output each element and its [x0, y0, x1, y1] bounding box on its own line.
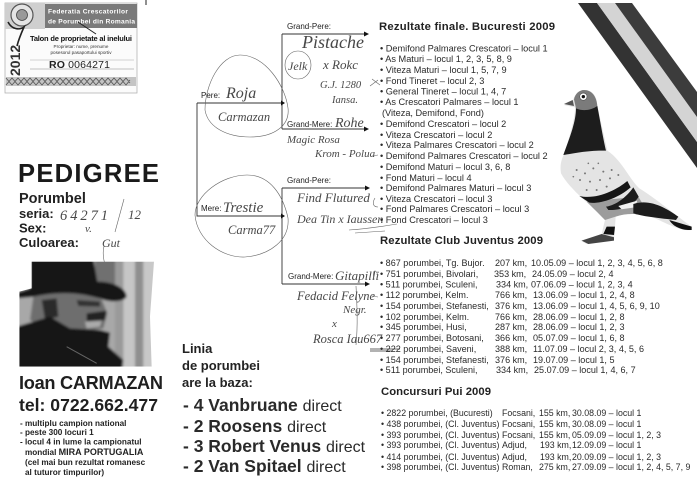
panel: Club Juventus results 2009: 10.05.09 – locul 1, 2, 3, 4, 5, 6, 8	[531, 258, 663, 268]
panel: ownership stamp: Talon de proprietate al inelului	[30, 34, 132, 43]
text block: breeder achievements: - locul 4 in lume la campionatul	[20, 438, 141, 446]
labels: pedigree tree: Grand-Pere:	[287, 22, 331, 31]
panel: young bird contests 2009: 27.09.09 – locul 1, 2, 4, 5, 7, 9	[572, 462, 690, 472]
decoration: national ribbon stripes	[578, 3, 697, 168]
text block: line basis heading: Linia	[182, 341, 213, 356]
panel: ownership stamp: Federatia Crescatorilor	[48, 8, 128, 16]
text block: line basis heading: de porumbei	[182, 358, 260, 373]
panel: Club Juventus results 2009: 366 km,	[495, 333, 527, 343]
panel: Club Juventus results 2009: 11.07.09 – locul 2, 3, 4, 5, 6	[533, 344, 644, 354]
panel: final results Bucuresti 2009: • As Crescatori Palmares – locul 1	[380, 97, 519, 107]
panel: young bird contests 2009: Focsani,	[502, 408, 535, 418]
handwriting: dam branch: Dea Tin x Iaussen	[296, 212, 383, 226]
panel: Club Juventus results 2009: 353 km,	[494, 269, 526, 279]
handwriting: dam branch: Rosca Iau667	[312, 332, 383, 346]
handwriting: sire branch	[205, 32, 376, 160]
panel: Club Juventus results 2009: 07.06.09 – locul 1, 2, 3, 4	[531, 280, 633, 290]
text block: breeder achievements: - peste 300 locuri 1	[20, 428, 94, 437]
icon: racing pigeon	[561, 90, 692, 244]
text block: pigeon details: 64271	[60, 208, 108, 224]
text block: breeder achievements: - multiplu campion national	[20, 419, 126, 428]
panel: Club Juventus results 2009: Rezultate Club Juventus 2009	[380, 235, 543, 247]
panel: ownership stamp: posesorul pasaportului sportiv	[50, 50, 112, 55]
panel: final results Bucuresti 2009: • Demifond Maturi – locul 3, 6, 8	[380, 162, 510, 172]
panel: final results Bucuresti 2009: (Viteza, Demifond, Fond)	[382, 108, 484, 118]
text block: breeder achievements: al tuturor timpurilor)	[25, 468, 104, 477]
text block: pigeon details: Sex:	[19, 220, 46, 236]
chart: pedigree tree lines	[197, 32, 370, 286]
handwriting: sire branch: Magic Rosa	[286, 134, 340, 146]
text block: pigeon details: v.	[85, 223, 92, 235]
panel: young bird contests 2009: 30.08.09 – locul 1	[572, 419, 642, 429]
panel: Club Juventus results 2009	[370, 235, 663, 375]
panel: Club Juventus results 2009: • 112 porumbei, Kelm.	[380, 290, 468, 300]
text block: line basis heading: are la baza:	[182, 375, 253, 390]
panel: young bird contests 2009: 193 km,	[540, 440, 571, 450]
panel: Club Juventus results 2009: • 154 porumbei, Stefanesti,	[380, 301, 489, 311]
handwriting: sire branch: Krom - Polua	[314, 148, 376, 160]
panel: Club Juventus results 2009: 766 km,	[495, 312, 527, 322]
panel: Club Juventus results 2009: 376 km,	[495, 301, 527, 311]
panel: final results Bucuresti 2009: • Viteza Maturi – locul 1, 5, 7, 9	[380, 65, 507, 75]
text block: pigeon details	[19, 191, 142, 268]
labels: pedigree tree	[201, 22, 333, 281]
text block: pigeon details: Culoarea:	[19, 235, 79, 250]
panel: ownership stamp: de Porumbei din Romania	[48, 18, 135, 26]
panel: young bird contests 2009: • 393 porumbei, (Cl. Juventus)	[381, 430, 499, 440]
panel: final results Bucuresti 2009: • Fond Tineret – locul 2, 3	[380, 76, 484, 86]
heading: breeder name and phone	[19, 373, 163, 415]
handwriting: dam branch: Negr.	[342, 304, 367, 316]
panel: final results Bucuresti 2009: • Demifond Palmares Crescatori – locul 2	[380, 151, 548, 161]
panel: final results Bucuresti 2009: • General Tineret – locul 1, 4, 7	[380, 87, 506, 97]
handwriting: dam branch: Carma77	[228, 223, 276, 237]
panel: Club Juventus results 2009: 766 km,	[495, 290, 527, 300]
panel: ownership stamp: Proprietar: nume, prenume	[54, 44, 109, 49]
panel: young bird contests 2009: 05.09.09 – locul 1, 2, 3	[572, 430, 661, 440]
panel: young bird contests 2009: 193 km,	[540, 452, 571, 462]
panel: Club Juventus results 2009: 207 km,	[495, 258, 527, 268]
handwriting: sire branch: Iansa.	[331, 95, 358, 106]
handwriting: sire branch: Roja	[225, 85, 256, 102]
handwriting: sire branch: Rohe	[334, 116, 364, 131]
panel: Club Juventus results 2009: • 222 porumbei, Saveni,	[380, 344, 476, 354]
panel: Club Juventus results 2009: • 345 porumbei, Husi,	[380, 322, 467, 332]
panel: Club Juventus results 2009: 388 km,	[495, 344, 527, 354]
panel: Club Juventus results 2009: 28.06.09 – locul 1, 2, 3	[533, 322, 625, 332]
handwriting: sire branch: G.J. 1280	[320, 80, 362, 91]
panel: Club Juventus results 2009: 13.06.09 – locul 1, 2, 4, 8	[533, 290, 635, 300]
panel: young bird contests 2009: 30.08.09 – locul 1	[572, 408, 642, 418]
panel: final results Bucuresti 2009: • Viteza Palmares Crescatori – locul 2	[380, 140, 534, 150]
handwriting: dam branch: Trestie	[223, 200, 264, 216]
panel: final results Bucuresti 2009: • Viteza Crescatori – locul 2	[380, 130, 492, 140]
panel: young bird contests 2009: 155 km,	[539, 430, 570, 440]
panel: young bird contests 2009: • 393 porumbei, (Cl. Juventus)	[381, 440, 499, 450]
panel: young bird contests 2009: 20.09.09 – locul 1, 2, 3	[572, 452, 661, 462]
list: pigeon lines	[183, 395, 366, 476]
panel: young bird contests 2009: • 414 porumbei, (Cl. Juventus)	[381, 452, 499, 462]
text block: breeder achievements: mondial MIRA PORTUGALIA	[25, 447, 144, 457]
text block: breeder achievements: (cel mai bun rezultat romanesc	[25, 458, 146, 467]
labels: pedigree tree: Mere:	[201, 204, 221, 213]
panel: Club Juventus results 2009: 19.07.09 – locul 1, 5	[533, 355, 614, 365]
handwriting: dam branch	[195, 175, 397, 346]
panel: Club Juventus results 2009: 334 km,	[496, 280, 528, 290]
panel: Club Juventus results 2009: 28.06.09 – locul 1, 2, 8	[533, 312, 625, 322]
list: pigeon lines: - 3 Robert Venus direct	[183, 436, 366, 456]
labels: pedigree tree: Grand-Pere:	[287, 176, 331, 185]
text block: pigeon details: seria:	[19, 206, 54, 221]
panel: Club Juventus results 2009: • 751 porumbei, Bivolari,	[380, 269, 478, 279]
handwriting: sire branch: Jelk	[288, 59, 308, 73]
panel: young bird contests 2009: 12.09.09 – locul 1	[572, 440, 642, 450]
panel: Club Juventus results 2009: 376 km,	[495, 355, 527, 365]
list: pigeon lines: - 2 Roosens direct	[183, 416, 327, 436]
panel: Club Juventus results 2009: • 277 porumbei, Botosani,	[380, 333, 484, 343]
handwriting: dam branch: Gitapilli	[335, 268, 379, 283]
heading: pedigree: PEDIGREE	[18, 160, 159, 188]
text block: line basis heading	[182, 341, 260, 390]
panel: ownership stamp	[5, 0, 146, 93]
panel: final results Bucuresti 2009: • Fond Maturi – locul 4	[380, 173, 472, 183]
panel: Club Juventus results 2009: • 102 porumbei, Kelm.	[380, 312, 469, 322]
panel: Club Juventus results 2009: • 867 porumbei, Tg. Bujor.	[380, 258, 485, 268]
heading: breeder name and phone: Ioan CARMAZAN	[19, 373, 163, 393]
panel: Club Juventus results 2009: 05.07.09 – locul 1, 6, 8	[533, 333, 625, 343]
panel: young bird contests 2009: Roman,	[502, 462, 533, 472]
labels: pedigree tree: Grand-Mere:	[288, 272, 333, 281]
handwriting: sire branch: Pistache	[301, 32, 364, 52]
panel: young bird contests 2009: 155 km,	[539, 408, 570, 418]
panel: ownership stamp: RO 0064271	[49, 59, 110, 71]
handwriting: dam branch: Find Flutured	[296, 190, 370, 205]
panel: young bird contests 2009: • 2822 porumbei, (Bucuresti)	[381, 408, 493, 418]
panel: young bird contests 2009: Focsani,	[502, 419, 535, 429]
panel: young bird contests 2009: Focsani,	[502, 430, 535, 440]
handwriting: dam branch: x	[331, 318, 337, 330]
panel: young bird contests 2009: Concursuri Pui 2009	[381, 386, 491, 398]
panel: final results Bucuresti 2009: • As Maturi – locul 1, 2, 3, 5, 8, 9	[380, 54, 512, 64]
text block: breeder achievements	[20, 419, 146, 477]
panel: final results Bucuresti 2009: • Demifond Palmares Crescatori – locul 1	[380, 44, 548, 54]
panel: young bird contests 2009: Adjud,	[502, 440, 527, 450]
list: pigeon lines: - 4 Vanbruane direct	[183, 395, 342, 415]
panel: young bird contests 2009	[381, 386, 690, 472]
handwriting: dam branch: Fedacid Felyne	[296, 289, 376, 303]
labels: pedigree tree: Grand-Mere:	[287, 120, 332, 129]
panel: Club Juventus results 2009: 25.07.09 – locul 1, 4, 6, 7	[534, 365, 636, 375]
labels: pedigree tree: Pere:	[201, 91, 220, 100]
panel: ownership stamp: 2012	[7, 45, 23, 76]
panel: final results Bucuresti 2009: • Fond Crescatori – locul 3	[380, 215, 488, 225]
panel: young bird contests 2009: • 438 porumbei, (Cl. Juventus)	[381, 419, 499, 429]
panel: final results Bucuresti 2009: • Fond Palmares Crescatori – locul 3	[380, 204, 529, 214]
photo: breeder portrait	[17, 258, 157, 370]
handwriting: sire branch: x Rokc	[322, 57, 358, 72]
list: pigeon lines: - 2 Van Spitael direct	[183, 456, 346, 476]
text block: pigeon details: Porumbel	[19, 191, 86, 207]
panel: young bird contests 2009: Adjud,	[502, 452, 527, 462]
handwriting: margin marks	[370, 79, 380, 297]
panel: final results Bucuresti 2009: • Viteza Crescatori – locul 3	[380, 194, 492, 204]
panel: Club Juventus results 2009: 13.06.09 – locul 1, 4, 5, 6, 9, 10	[533, 301, 660, 311]
handwriting: sire branch: Carmazan	[218, 110, 270, 124]
panel: Club Juventus results 2009: 334 km,	[496, 365, 528, 375]
text block: pigeon details: 12	[128, 207, 142, 222]
panel: young bird contests 2009: • 398 porumbei, (Cl. Juventus)	[381, 462, 499, 472]
panel: final results Bucuresti 2009: • Demifond Palmares Maturi – locul 3	[380, 183, 531, 193]
panel: final results Bucuresti 2009: Rezultate finale. Bucuresti 2009	[379, 21, 555, 33]
panel: Club Juventus results 2009: 287 km,	[495, 322, 527, 332]
panel: Club Juventus results 2009: • 511 porumbei, Sculeni,	[380, 365, 478, 375]
panel: final results Bucuresti 2009	[379, 21, 555, 225]
panel: young bird contests 2009: 275 km,	[539, 462, 570, 472]
panel: young bird contests 2009: 155 km,	[539, 419, 570, 429]
text block: pigeon details: Gut	[102, 236, 121, 250]
panel: Club Juventus results 2009: • 511 porumbei, Sculeni,	[380, 280, 478, 290]
heading: breeder name and phone: tel: 0722.662.477	[19, 395, 158, 415]
panel: final results Bucuresti 2009: • Demifond Crescatori – locul 2	[380, 119, 506, 129]
panel: Club Juventus results 2009: • 154 porumbei, Stefanesti,	[380, 355, 489, 365]
panel: Club Juventus results 2009: 24.05.09 – locul 2, 4	[532, 269, 613, 279]
